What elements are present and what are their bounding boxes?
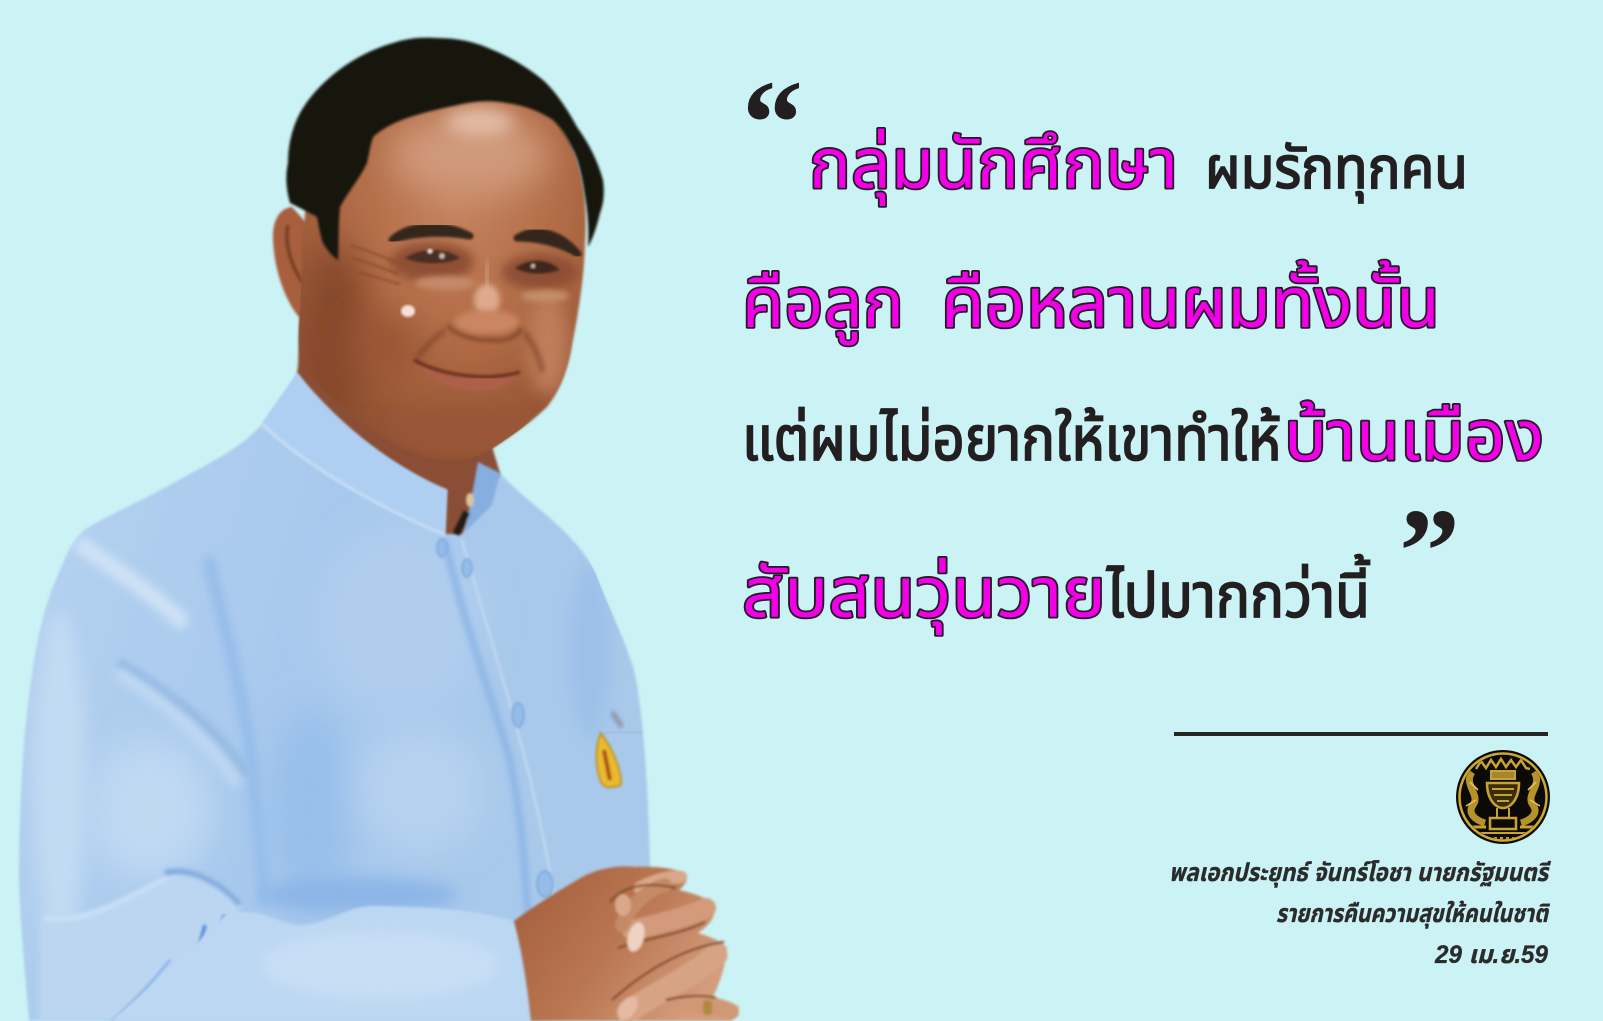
cheek highlight [401, 305, 415, 317]
speaker name and title: พลเอกประยุทธ์ จันทร์โอชา นายกรัฐมนตรี [1169, 859, 1552, 888]
sleeve folds near cuff [40, 877, 240, 1021]
collar [262, 373, 500, 535]
crow's feet wrinkles [350, 245, 400, 284]
shirt buttons [437, 539, 553, 897]
opening quotation mark: “ [742, 56, 803, 191]
hair [286, 38, 604, 260]
eyebrow right [517, 232, 578, 254]
line 2 [742, 260, 1440, 346]
quote text [742, 125, 1544, 635]
eye socket shadows [390, 242, 474, 282]
nose [416, 262, 542, 372]
eye left [405, 249, 460, 263]
eye right [515, 261, 560, 274]
line 4: ไปมากกว่านี้ [1106, 554, 1370, 631]
line 1: ผมรักทุกคน [1205, 136, 1468, 203]
date: 29 เม.ย.59 [1434, 941, 1548, 969]
programme name: รายการคืนความสุขให้คนในชาติ [1276, 900, 1550, 929]
portrait photo of the prime minister [19, 38, 739, 1021]
line 4 [742, 554, 1370, 635]
line 1 [809, 125, 1468, 206]
interlaced fingers [622, 877, 732, 1012]
attribution text [1169, 859, 1552, 969]
clasped hands [514, 866, 739, 1021]
placket [445, 540, 528, 920]
icon: government seal [1456, 750, 1550, 844]
ear [273, 207, 322, 318]
mouth [414, 360, 520, 391]
line 4: สับสนวุ่นวาย [742, 554, 1106, 635]
line 3: แต่ผมไม่อยากให้เขาทำให้ [742, 405, 1281, 474]
shirt body [19, 373, 650, 1021]
gold lapel badge [596, 733, 621, 787]
line 2: คือลูก [742, 264, 904, 346]
face [299, 96, 586, 460]
line 1: กลุ่มนักศึกษา [809, 125, 1178, 206]
eyebrow left [392, 226, 470, 240]
elbow fold [118, 662, 248, 775]
closing quotation mark: ” [1399, 484, 1460, 619]
sleeve seam shadow [208, 557, 265, 905]
neck [297, 310, 500, 534]
forearm cuff [110, 906, 531, 1021]
line 2: คือหลานผมทั้งนั้น [941, 260, 1440, 342]
line 3: บ้านเมือง [1284, 397, 1544, 475]
line 3 [742, 397, 1544, 475]
divider line above attribution [1174, 732, 1548, 736]
